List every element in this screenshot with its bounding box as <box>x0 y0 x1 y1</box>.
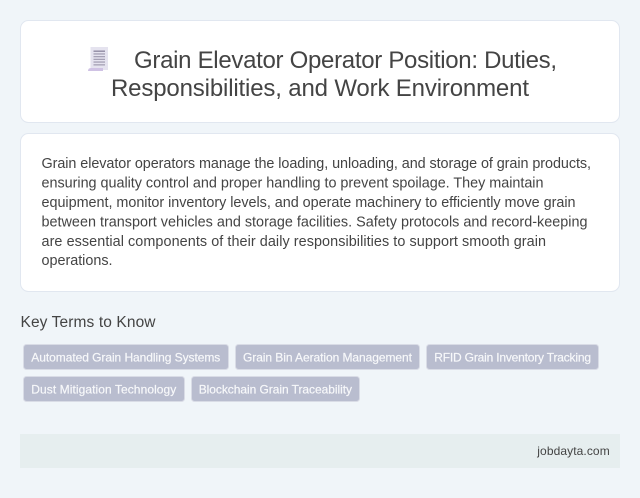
tag: grain bin aeration <box>236 344 420 370</box>
text block: description: ensuring quality control and proper handling to prevent spoilage. They maintain <box>42 176 544 192</box>
text block: description: operations. <box>42 253 112 269</box>
title <box>111 47 557 102</box>
text block: description: Grain elevator operators manage the loading, unloading, and storage of grain products, <box>42 156 591 172</box>
tag: rfid inventory <box>426 344 598 370</box>
icon: document scroll <box>88 47 108 71</box>
tag: automated grain handling <box>24 344 228 370</box>
tag: blockchain traceability <box>192 376 360 402</box>
panel: description <box>20 134 620 292</box>
panel: title card <box>20 20 620 122</box>
key term tags <box>24 344 598 402</box>
footer: site name: jobdayta.com <box>536 444 610 458</box>
title: Responsibilities, and Work Environment <box>111 75 529 102</box>
footer <box>20 434 620 468</box>
text block: description: equipment, monitor inventory levels, and operate machinery to efficiently move grain <box>42 195 576 211</box>
tag: dust mitigation <box>24 376 184 402</box>
tag: rfid inventory: RFID Grain Inventory Tracking <box>434 350 591 364</box>
tag: blockchain traceability: Blockchain Grain Traceability <box>199 382 352 396</box>
tag: grain bin aeration: Grain Bin Aeration Management <box>243 350 413 364</box>
tag: dust mitigation: Dust Mitigation Technology <box>31 382 176 396</box>
text block: description <box>42 156 591 269</box>
heading: key terms: Key Terms to Know <box>20 314 156 331</box>
text block: description: are essential components of their daily responsibilities to support smooth grain <box>42 234 546 250</box>
text block: description: between transport vehicles and storage facilities. Safety protocols and record-keeping <box>42 214 588 230</box>
tag: automated grain handling: Automated Grain Handling Systems <box>31 350 220 364</box>
title: Grain Elevator Operator Position: Duties, <box>134 47 557 74</box>
